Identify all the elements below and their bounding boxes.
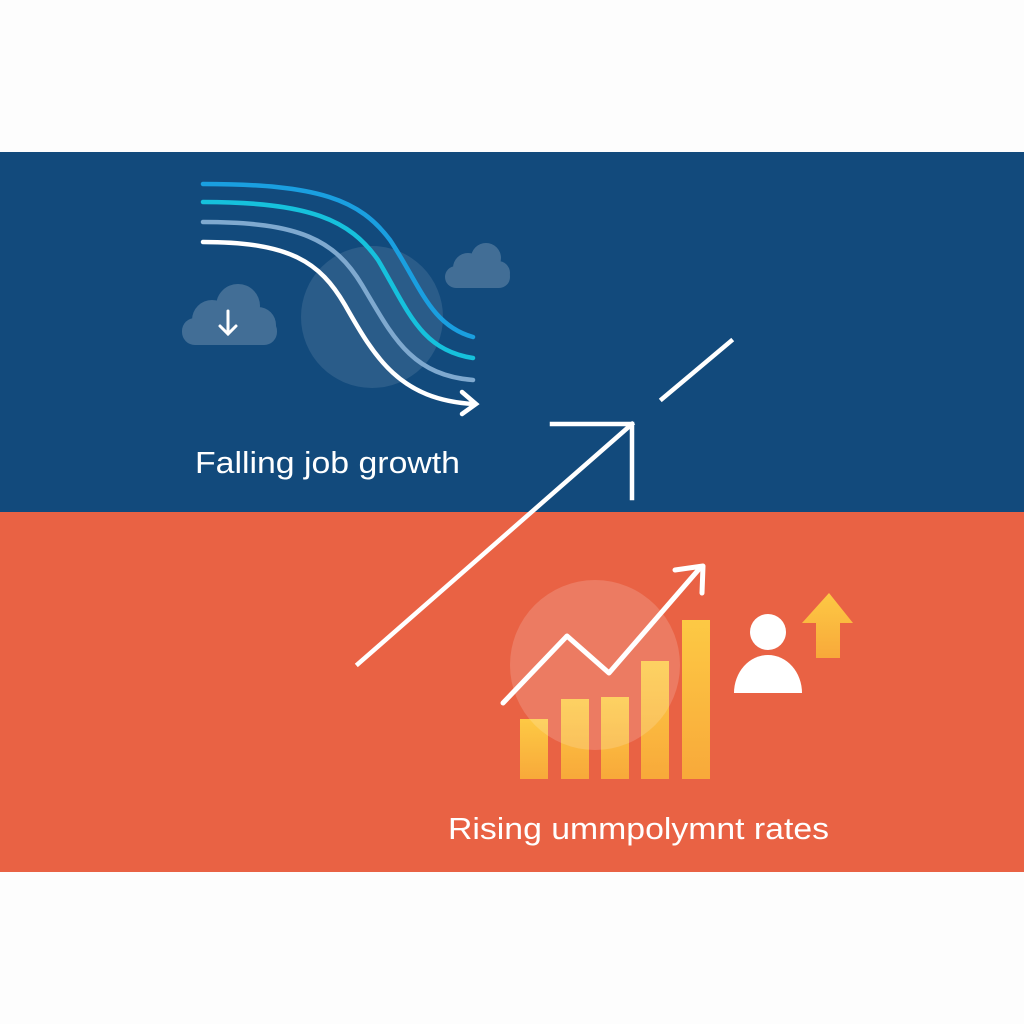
arrow: big rising arrow — [358, 341, 731, 664]
icon: cloud with down arrow — [182, 284, 277, 345]
icon: down arrow in cloud — [220, 311, 236, 334]
chart: falling curves — [203, 184, 476, 414]
panel: falling job growth — [0, 152, 1024, 512]
glow circle top — [301, 246, 443, 388]
arrow: trend line — [503, 566, 703, 703]
icon: up arrow — [802, 593, 853, 658]
icon: person — [734, 614, 802, 693]
icon: cloud right — [445, 243, 510, 288]
heading: Rising unemployment rates: Rising ummpolymnt rates — [448, 811, 829, 846]
panel: rising unemployment — [0, 512, 1024, 872]
heading: Falling job growth: Falling job growth — [195, 445, 460, 480]
chart: bar chart — [520, 620, 710, 779]
glow circle bottom — [510, 580, 680, 750]
